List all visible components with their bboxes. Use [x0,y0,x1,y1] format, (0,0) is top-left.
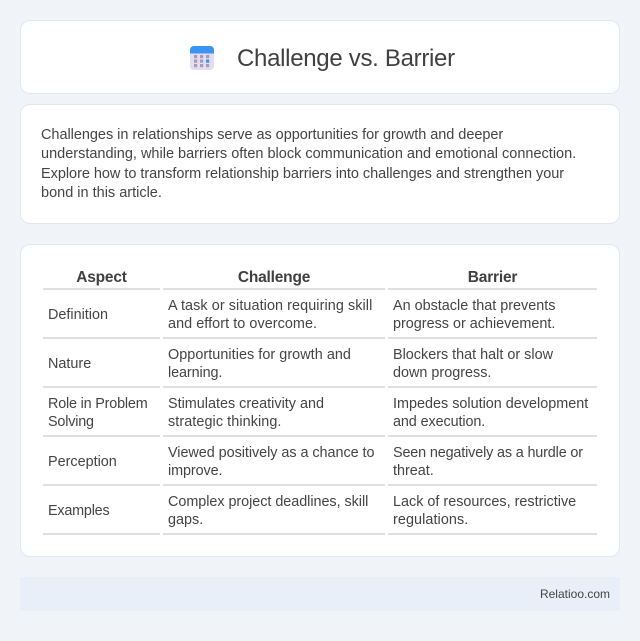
intro text: understanding, while barriers often block communication and emotional connection. [41,146,576,162]
header row: Barrier [468,269,517,286]
row: examples: Examples [48,503,109,519]
row: perception [48,445,583,479]
row: perception: threat. [393,463,434,479]
footer [20,577,620,611]
title card [20,20,620,94]
row: perception: Viewed positively as a chance to [168,445,374,461]
row: definition: A task or situation requiring skill [168,298,372,314]
footer brand: Relatioo.com [540,587,610,601]
row: nature: down progress. [393,365,491,381]
row: nature [48,347,553,381]
row: role in problem solving: Stimulates creativity and [168,396,324,412]
row: perception: Perception [48,454,117,470]
table card [20,244,620,557]
row: role in problem solving [48,396,588,430]
intro text: Explore how to transform relationship barriers into challenges and strengthen your [41,166,564,182]
row: role in problem solving: Role in Problem [48,396,148,412]
row: definition: An obstacle that prevents [393,298,555,314]
row: role in problem solving: strategic thinking. [168,414,282,430]
header row: Challenge [238,269,310,286]
icon: calendar [190,46,214,70]
row: nature: learning. [168,365,222,381]
header row: Aspect [76,269,127,286]
row: role in problem solving: and execution. [393,414,485,430]
row: examples: gaps. [168,512,203,528]
row: examples: regulations. [393,512,468,528]
row: nature: Nature [48,356,91,372]
row: perception: improve. [168,463,222,479]
comparison table [43,269,597,535]
row: definition [48,298,555,332]
intro text: Challenges in relationships serve as opportunities for growth and deeper [41,127,503,143]
row: nature: Opportunities for growth and [168,347,351,363]
row: definition: and effort to overcome. [168,316,317,332]
row: examples: Complex project deadlines, skill [168,494,368,510]
header row [76,269,518,286]
row: role in problem solving: Solving [48,414,94,430]
row: examples: Lack of resources, restrictive [393,494,576,510]
row: nature: Blockers that halt or slow [393,347,553,363]
row: definition: Definition [48,307,108,323]
intro text [41,127,576,201]
intro card [20,104,620,224]
intro text: bond in this article. [41,185,162,201]
row: definition: progress or achievement. [393,316,555,332]
row: perception: Seen negatively as a hurdle or [393,445,583,461]
title: Challenge vs. Barrier [237,45,455,72]
row: examples [48,494,576,528]
row: role in problem solving: Impedes solution development [393,396,588,412]
